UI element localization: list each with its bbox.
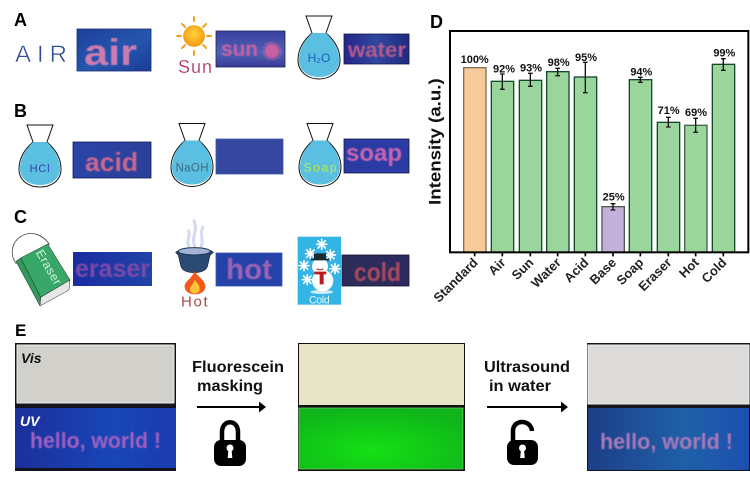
value labels (461, 47, 736, 203)
icon: soap flask: Soap (304, 160, 337, 174)
panel label A: A (14, 10, 27, 30)
icon: snowman card (298, 237, 341, 306)
x axis labels: Sun (509, 255, 536, 283)
value labels: 98% (548, 57, 570, 69)
panel C: eraser, hot and cold tests (12, 221, 409, 311)
photo: recovered sample: hello, world ! (600, 429, 733, 454)
photo: acid (73, 142, 151, 178)
bar chart: intensity per test (426, 31, 748, 305)
photo: cold: cold (354, 257, 401, 287)
value labels: 94% (630, 67, 653, 79)
photo: sun: sun (221, 38, 258, 61)
photo: hot (216, 253, 282, 286)
photo: soap (344, 139, 409, 173)
icon: sun (177, 17, 212, 77)
label: ultrasound in water: Ultrasound (484, 359, 570, 376)
label: ultrasound in water: in water (489, 378, 551, 395)
photo: hot: hot (226, 254, 272, 286)
icon: water flask: H₂O (308, 51, 330, 65)
photo: sun (216, 31, 285, 67)
photo: original sample: hello, world ! (30, 428, 161, 453)
photo: original sample (15, 343, 176, 471)
icon: soap flask (299, 124, 341, 186)
photo: masked sample (298, 343, 465, 471)
plot frame (450, 31, 748, 252)
panel label B: B (14, 101, 27, 121)
value labels: 69% (685, 107, 707, 119)
panel B: acid, base and soap tests (19, 124, 409, 187)
icon: boiling pot over flame (176, 221, 213, 311)
value labels: 99% (713, 47, 736, 59)
value labels: 95% (575, 52, 597, 64)
x axis labels: Soap (613, 255, 646, 288)
error bars (500, 59, 726, 210)
icon: eraser (12, 233, 70, 306)
x axis labels: Standard (430, 255, 481, 305)
photo: soap: soap (346, 140, 402, 167)
panel label D: D (430, 12, 443, 32)
icon: sun: Sun (178, 57, 212, 77)
photo: eraser: eraser (75, 255, 150, 283)
x axis labels: Eraser (635, 255, 674, 294)
x axis labels (430, 254, 729, 305)
icon: NaOH flask: NaOH (176, 162, 208, 174)
panel A: air, sun and water tests (15, 16, 409, 79)
photo: base, blank (216, 139, 283, 174)
icon: AIR lettering: AIR (15, 41, 67, 68)
panel label E: E (15, 321, 26, 340)
icon: closed lock (214, 422, 246, 466)
x axis labels: Air (485, 255, 508, 278)
icon: open lock (507, 422, 538, 465)
value labels: 100% (461, 54, 489, 66)
x axis labels: Hot (676, 254, 702, 281)
x axis labels: Cold (698, 255, 729, 286)
arrow: masking (197, 402, 266, 412)
photo: original sample: UV (20, 413, 41, 429)
value labels: 71% (658, 105, 680, 117)
icon: HCl flask: HCl (30, 163, 50, 175)
icon: eraser: Eraser (33, 247, 64, 287)
photo: air (77, 29, 151, 73)
panel E: masking workflow (15, 343, 750, 471)
photo: water (344, 34, 409, 64)
icon: NaOH flask (171, 124, 213, 186)
icon: HCl flask (19, 125, 61, 187)
photo: acid: acid (85, 147, 138, 177)
panel label C: C (14, 207, 27, 227)
y axis title: Intensity (a.u.) (426, 78, 445, 205)
value labels: 25% (603, 191, 625, 203)
photo: original sample: Vis (21, 350, 42, 366)
label: ultrasound in water (484, 359, 570, 395)
label: fluorescein masking (192, 359, 284, 395)
arrow: ultrasound (487, 402, 568, 412)
label: fluorescein masking: masking (197, 378, 263, 395)
bars (464, 64, 735, 252)
x axis labels: Water (528, 255, 564, 291)
photo: recovered sample (587, 343, 750, 471)
x axis labels: Base (587, 255, 619, 287)
x axis ticks (475, 252, 723, 256)
value labels: 92% (493, 64, 515, 76)
photo: air: air (84, 32, 137, 73)
label: fluorescein masking: Fluorescein (192, 359, 284, 376)
photo: water: water (347, 39, 406, 62)
value labels: 93% (520, 63, 542, 75)
x axis labels: Acid (561, 255, 591, 285)
icon: boiling pot over flame: Hot (181, 294, 208, 311)
icon: water flask (298, 16, 340, 79)
icon: snowman card: Cold (309, 294, 330, 306)
